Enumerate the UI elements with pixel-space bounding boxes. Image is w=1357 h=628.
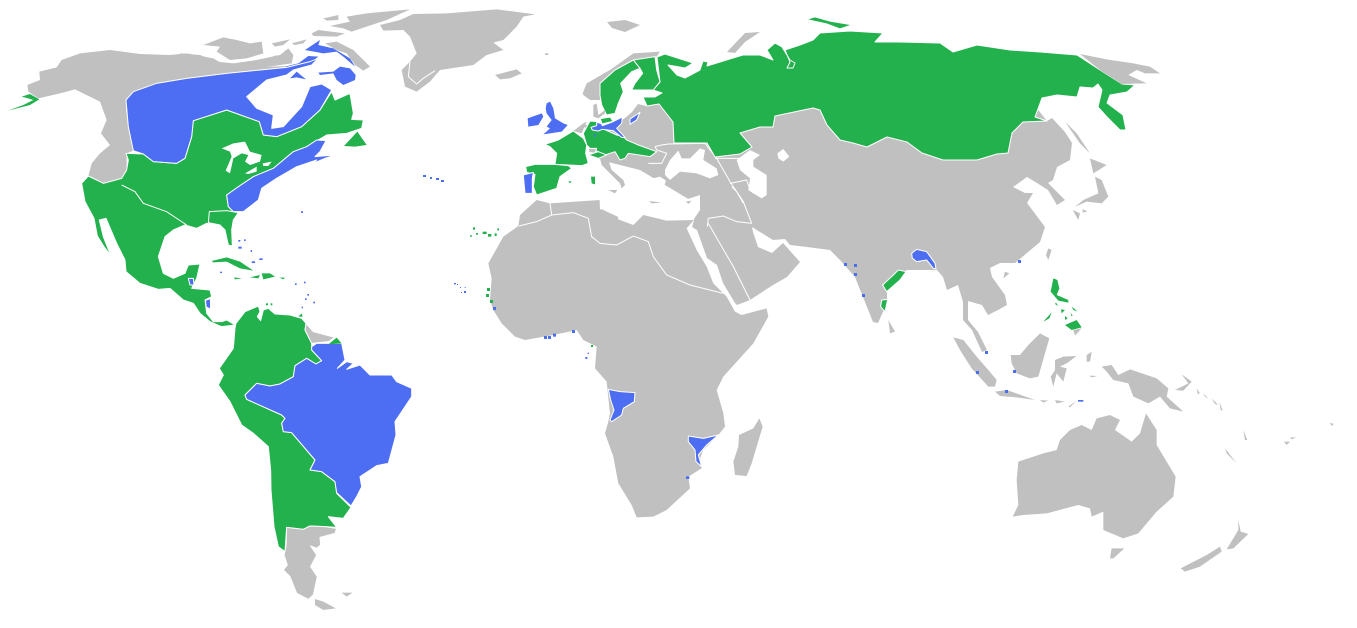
- grey Norway: [583, 52, 660, 100]
- Italy and Mediterranean islands: [600, 158, 692, 204]
- North America grey land: [27, 50, 287, 183]
- Japan and nearby islands: [888, 122, 1108, 333]
- blue Canadian territories and islands: [285, 40, 356, 85]
- blue Atlantic colonies: [227, 140, 335, 212]
- blue coastal forts: [454, 283, 689, 479]
- green Alaska coast: [8, 94, 39, 111]
- blue Rupert's Land: [126, 58, 332, 163]
- Black Sea: [665, 148, 718, 180]
- green Sardinia: [591, 177, 595, 184]
- grey Low Countries: [573, 122, 587, 133]
- Madagascar: [733, 418, 763, 476]
- South America: [218, 306, 412, 610]
- grey Patagonia: [283, 526, 337, 599]
- green Indian territories: [881, 270, 906, 312]
- Scandinavia: [583, 52, 660, 115]
- Chukotka grey: [1080, 54, 1160, 84]
- green French Guiana: [328, 338, 342, 344]
- green Finland: [632, 57, 660, 90]
- blue Belize and Mosquito Coast: [188, 278, 210, 308]
- Azores: [423, 175, 444, 182]
- blue Angola: [608, 389, 635, 422]
- Falkland Islands: [342, 593, 353, 597]
- Mediterranean sea: [530, 157, 700, 225]
- great lakes: [222, 142, 262, 173]
- grey Denmark: [593, 103, 605, 118]
- green Balearic Islands: [568, 181, 572, 183]
- Tasmania: [1110, 548, 1124, 558]
- Saharan and Arabian boundaries: [519, 203, 750, 300]
- blue East Poland territory: [630, 112, 640, 124]
- Africa: [454, 200, 768, 517]
- green Pomerania: [601, 118, 612, 123]
- blue Great Britain: [543, 102, 568, 134]
- Africa grey land: [488, 200, 768, 517]
- blue Ireland: [528, 113, 543, 127]
- blue Asian trading posts: [844, 260, 1021, 297]
- North America colonies: [8, 58, 367, 327]
- green northern Italy: [588, 152, 607, 158]
- New Spain boundary: [122, 185, 187, 225]
- Caribbean islands blue: [220, 211, 315, 308]
- blue Brazil: [245, 343, 412, 506]
- Mediterranean and inland seas: [530, 143, 789, 227]
- green Newfoundland: [344, 132, 367, 147]
- Western Europe: [523, 102, 657, 195]
- blue Bengal: [912, 249, 936, 269]
- Caspian Sea: [737, 150, 767, 198]
- Caribbean islands green: [212, 257, 303, 317]
- green Spain: [526, 164, 572, 195]
- Eurasia grey land: [580, 62, 1072, 352]
- Aral Sea: [777, 149, 789, 162]
- blue Portugal: [523, 172, 533, 193]
- blue Hanover enclave: [593, 134, 597, 137]
- green Holy Roman Empire and Austria: [583, 121, 657, 160]
- green Philippines: [1043, 278, 1082, 330]
- Novaya Zemlya and Svalbard grey: [607, 20, 760, 53]
- grey Switzerland: [588, 148, 597, 153]
- Ottoman and Persian boundaries: [648, 143, 752, 227]
- Novaya Zemlya green: [808, 17, 850, 28]
- green North and Central America: [82, 92, 363, 327]
- blue Prussia: [591, 117, 625, 137]
- West African forts: [486, 288, 593, 347]
- New Zealand: [1181, 520, 1248, 572]
- green Florida: [208, 211, 238, 246]
- grey Guiana: [305, 323, 335, 343]
- blue Mozambique: [688, 435, 718, 467]
- green Spanish South America: [218, 306, 351, 552]
- Tierra del Fuego: [315, 599, 336, 610]
- arctic islands and Greenland: [180, 9, 548, 92]
- Indonesian and Pacific islands: [953, 328, 1333, 463]
- Canary Islands: [470, 227, 499, 237]
- blue Indonesian trading posts: [976, 351, 1083, 402]
- green Sweden: [600, 60, 640, 115]
- green Russia: [643, 31, 1135, 160]
- Southeast Asia and Oceania: [953, 278, 1333, 572]
- green France: [545, 131, 588, 166]
- Australia: [1013, 413, 1176, 538]
- Asia details: [844, 54, 1160, 333]
